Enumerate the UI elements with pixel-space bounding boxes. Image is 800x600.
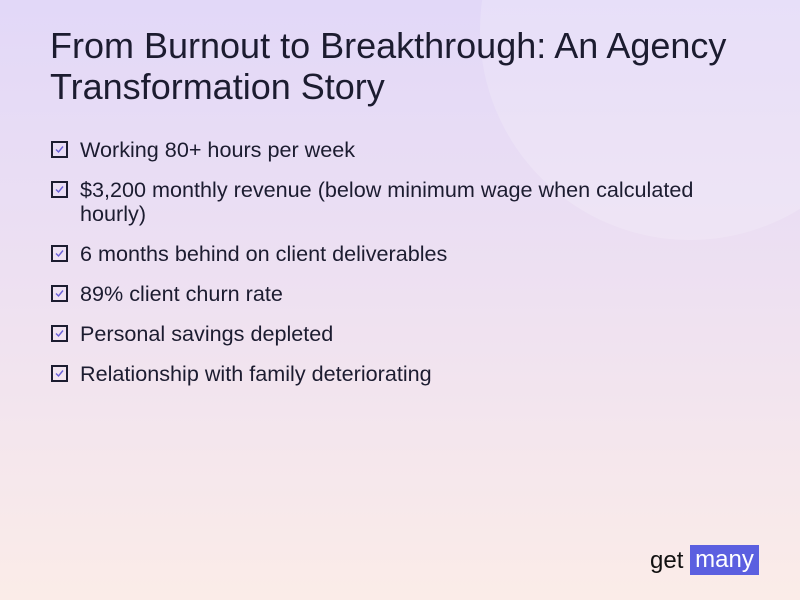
logo: get [650, 547, 683, 574]
logo: many [695, 546, 754, 573]
item: churn: 89% client churn rate [80, 281, 283, 306]
logo [650, 545, 759, 575]
item: deliverables: 6 months behind on client deliverables [80, 241, 447, 266]
checklist [51, 137, 693, 386]
title: From Burnout to Breakthrough: An Agency Transformation Story [50, 25, 726, 107]
item: revenue: $3,200 monthly revenue (below minimum wage when calculated hourly) [80, 177, 693, 226]
item: hours: Working 80+ hours per week [80, 137, 355, 162]
item: savings: Personal savings depleted [80, 321, 333, 346]
item: family: Relationship with family deteriorating [80, 361, 432, 386]
